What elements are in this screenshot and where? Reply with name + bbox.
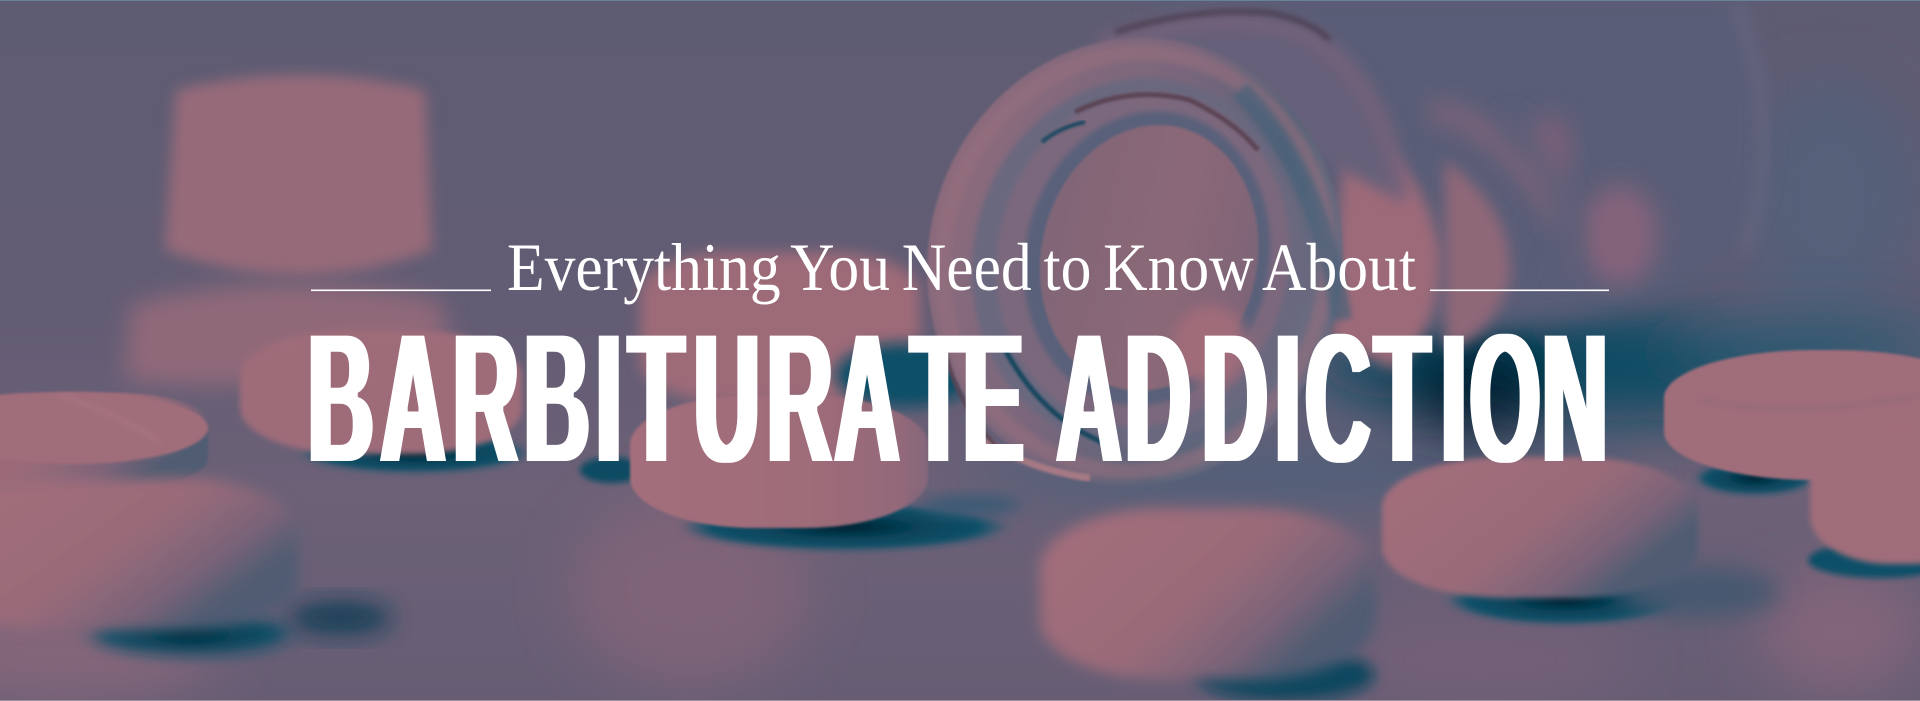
top edge line <box>0 0 1920 1</box>
left tablet, blurred <box>0 478 392 658</box>
shadow <box>1195 649 1375 701</box>
jar neck dark arc <box>1115 12 1330 40</box>
shadow <box>297 432 533 474</box>
shadow <box>1693 460 1817 496</box>
blurred pill stack, upper left <box>125 75 450 385</box>
glass jar body <box>1100 0 1765 370</box>
teal area under jar <box>1310 310 1920 435</box>
pink reflection in jar base <box>1172 305 1248 385</box>
outer rim <box>886 0 1384 525</box>
jar rim <box>886 0 1384 525</box>
front tablet, blurred <box>1040 508 1376 701</box>
teal wedge near centre pill <box>835 343 975 407</box>
shadow <box>1808 542 1920 578</box>
left tablet, sharp <box>0 392 208 488</box>
pill behind title, centre <box>640 252 920 402</box>
jar rim highlights <box>945 90 1342 478</box>
right rule <box>1430 290 1609 291</box>
edge tablet, right <box>1808 427 1920 578</box>
far right tablet <box>1664 350 1920 496</box>
shadow <box>677 502 1013 552</box>
right tablet, blurred <box>1382 457 1780 626</box>
subtitle: Everything You Need to Know About <box>507 229 1416 305</box>
jar right edge <box>1735 5 1763 250</box>
shadow <box>80 610 300 658</box>
left rule <box>311 290 491 291</box>
pills in jar <box>1330 135 1440 370</box>
bottom edge line <box>0 700 1920 701</box>
inner opening <box>1016 104 1283 411</box>
centre tablet <box>630 395 1013 552</box>
tablet top <box>0 392 208 464</box>
pill behind title, left <box>240 330 533 474</box>
shadow <box>1443 574 1687 626</box>
title: BARBITURATE ADDICTION <box>308 295 1607 504</box>
shadow under jar rim <box>920 495 1020 515</box>
